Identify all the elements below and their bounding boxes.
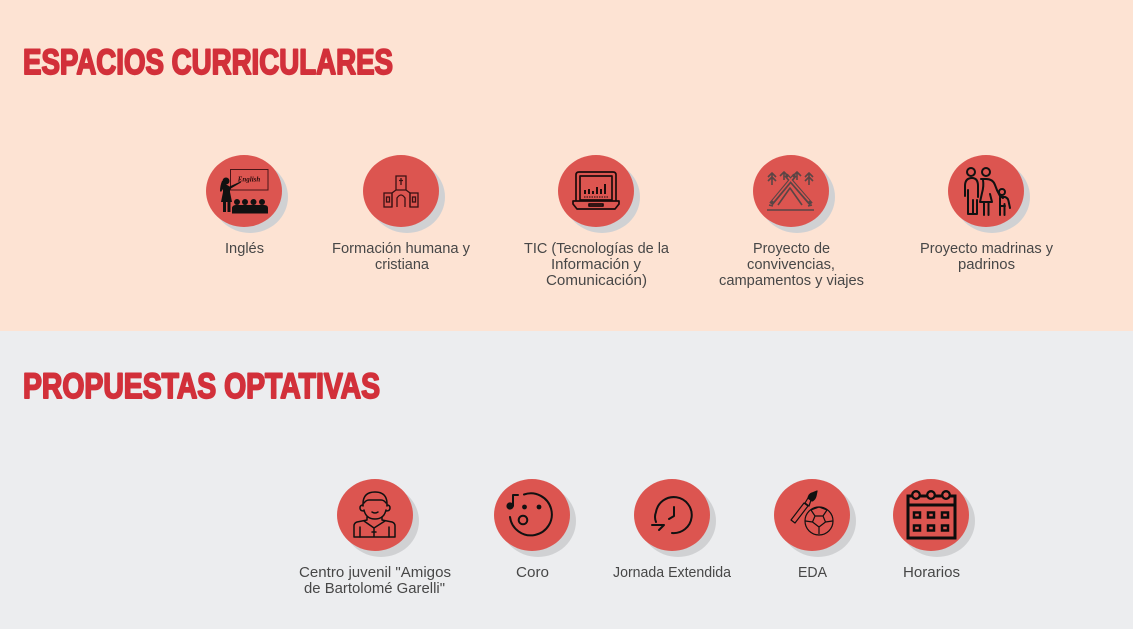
label: Proyecto de convivencias, campamentos y viajes bbox=[719, 240, 864, 289]
label: Proyecto de convivencias, campamentos y viajes: convivencias, bbox=[747, 256, 835, 273]
label: Jornada Extendida: Jornada Extendida bbox=[613, 564, 732, 581]
label: TIC (Tecnologías de la Información y Comunicación): Información y bbox=[551, 256, 641, 273]
label: Centro juvenil Amigos de Bartolomé Garelli: Centro juvenil "Amigos bbox=[299, 564, 451, 581]
label: TIC (Tecnologías de la Información y Comunicación): TIC (Tecnologías de la bbox=[524, 240, 670, 257]
icon: singing face bbox=[506, 493, 552, 535]
icon: church school building bbox=[384, 176, 418, 207]
label: TIC (Tecnologías de la Información y Comunicación): Comunicación) bbox=[546, 272, 647, 289]
item: Formación humana y cristiana bbox=[332, 155, 470, 273]
item: Proyecto madrinas y padrinos bbox=[920, 155, 1053, 273]
label: Proyecto madrinas y padrinos: Proyecto madrinas y bbox=[920, 240, 1053, 257]
item: TIC bbox=[524, 155, 670, 289]
icon: family bbox=[965, 168, 1010, 215]
label: Proyecto madrinas y padrinos: padrinos bbox=[958, 256, 1015, 273]
label: Coro: Coro bbox=[516, 564, 549, 581]
label: EDA: EDA bbox=[798, 564, 827, 581]
label: Inglés: Inglés bbox=[225, 240, 264, 257]
icon: clock with return arrow bbox=[652, 497, 692, 533]
item: Centro juvenil bbox=[299, 479, 451, 597]
label: Horarios: Horarios bbox=[903, 564, 960, 581]
item: Proyecto de convivencias bbox=[719, 155, 864, 289]
label: Proyecto madrinas y padrinos bbox=[920, 240, 1053, 273]
icon: teacher with class: English bbox=[237, 176, 260, 184]
label: Formación humana y cristiana bbox=[332, 240, 470, 273]
heading: espacios curriculares: ESPACIOS CURRICULARES bbox=[23, 43, 393, 82]
label: Proyecto de convivencias, campamentos y viajes: campamentos y viajes bbox=[719, 272, 864, 289]
icon: tent and trees bbox=[767, 172, 814, 210]
icon: calendar bbox=[908, 491, 955, 538]
label: Formación humana y cristiana: Formación humana y bbox=[332, 240, 470, 257]
item: Coro bbox=[494, 479, 576, 581]
icon: laptop with chart bbox=[573, 172, 619, 209]
label: Centro juvenil Amigos de Bartolomé Garelli bbox=[299, 564, 451, 597]
panel: propuestas optativas background bbox=[0, 331, 1133, 629]
item: Jornada Extendida bbox=[613, 479, 732, 581]
icon: paintbrush and soccer ball bbox=[791, 491, 833, 535]
label: Formación humana y cristiana: cristiana bbox=[375, 256, 430, 273]
panel: espacios curriculares background bbox=[0, 0, 1133, 331]
label: TIC (Tecnologías de la Información y Comunicación) bbox=[524, 240, 670, 289]
label: Centro juvenil Amigos de Bartolomé Garelli: de Bartolomé Garelli" bbox=[304, 580, 445, 597]
icon: priest portrait bbox=[354, 492, 395, 537]
item: Horarios bbox=[893, 479, 975, 581]
heading: propuestas optativas: PROPUESTAS OPTATIVAS bbox=[23, 367, 380, 406]
item: Inglés bbox=[206, 155, 288, 257]
item: EDA bbox=[774, 479, 856, 581]
label: Proyecto de convivencias, campamentos y viajes: Proyecto de bbox=[753, 240, 830, 257]
